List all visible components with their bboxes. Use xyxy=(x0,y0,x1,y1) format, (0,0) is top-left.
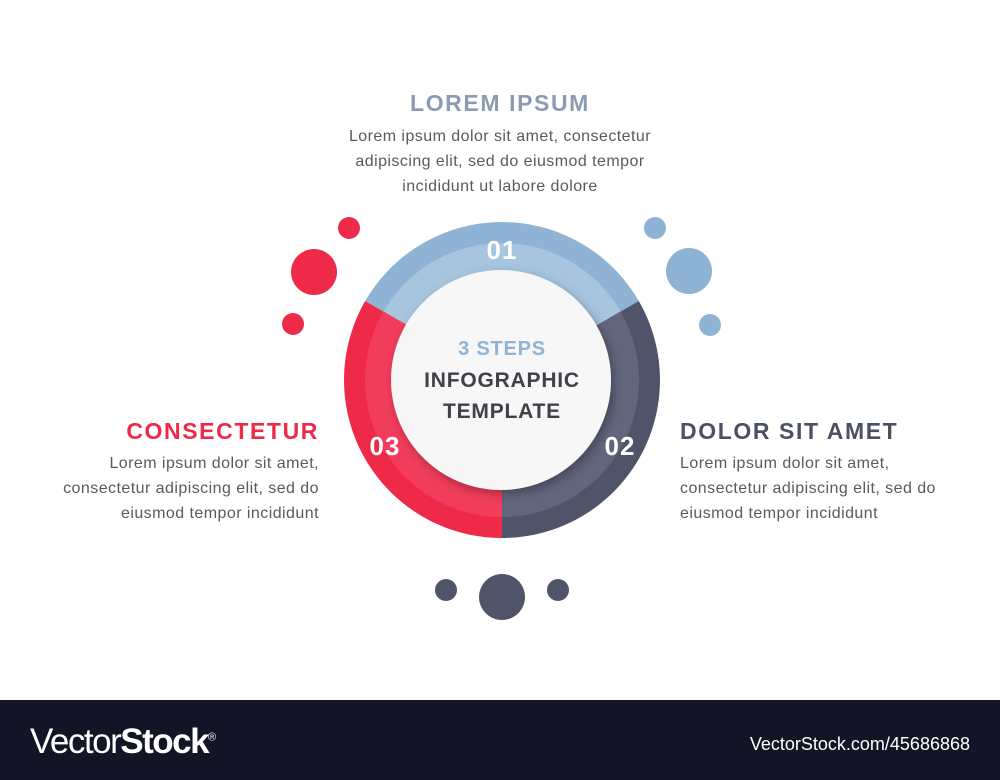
heading: consectetur: CONSECTETUR xyxy=(126,418,319,444)
heading: dolor sit amet: DOLOR SIT AMET xyxy=(680,418,898,444)
text block: step 1: incididunt ut labore dolore xyxy=(402,178,598,195)
center title: INFOGRAPHIC xyxy=(424,369,580,392)
text block: step 2: Lorem ipsum dolor sit amet, xyxy=(680,455,890,472)
text block: step 3: eiusmod tempor incididunt xyxy=(121,505,319,522)
heading: lorem ipsum: LOREM IPSUM xyxy=(410,90,590,116)
center white circle xyxy=(391,270,611,490)
text block: step 3: Lorem ipsum dolor sit amet, xyxy=(109,455,319,472)
dots: blue xyxy=(644,217,721,336)
dots: red xyxy=(282,217,360,335)
number 01: 01 xyxy=(487,235,517,265)
number 02: 02 xyxy=(605,431,635,461)
text block: step 2: consectetur adipiscing elit, sed do xyxy=(680,480,936,497)
url text: VectorStock.com/45686868 xyxy=(750,734,970,754)
number 03: 03 xyxy=(370,431,400,461)
center title: TEMPLATE xyxy=(443,400,561,423)
segment 03 red xyxy=(344,301,502,538)
dots: dark xyxy=(435,574,569,620)
text block: step 3 xyxy=(63,455,319,522)
text block: step 3: consectetur adipiscing elit, sed do xyxy=(63,480,319,497)
text block: step 1: Lorem ipsum dolor sit amet, consectetur xyxy=(349,128,651,145)
text block: step 1: adipiscing elit, sed do eiusmod tempor xyxy=(355,153,645,170)
text block: step 2 xyxy=(680,455,936,522)
text block: step 2: eiusmod tempor incididunt xyxy=(680,505,878,522)
segment 02 dark xyxy=(502,301,660,538)
segment 01 blue xyxy=(365,222,639,380)
text block: step 1 xyxy=(349,128,651,195)
center title: 3 STEPS xyxy=(458,338,546,360)
footer banner xyxy=(0,700,1000,780)
center title xyxy=(424,338,580,423)
logo text: VectorStock® xyxy=(30,722,215,761)
